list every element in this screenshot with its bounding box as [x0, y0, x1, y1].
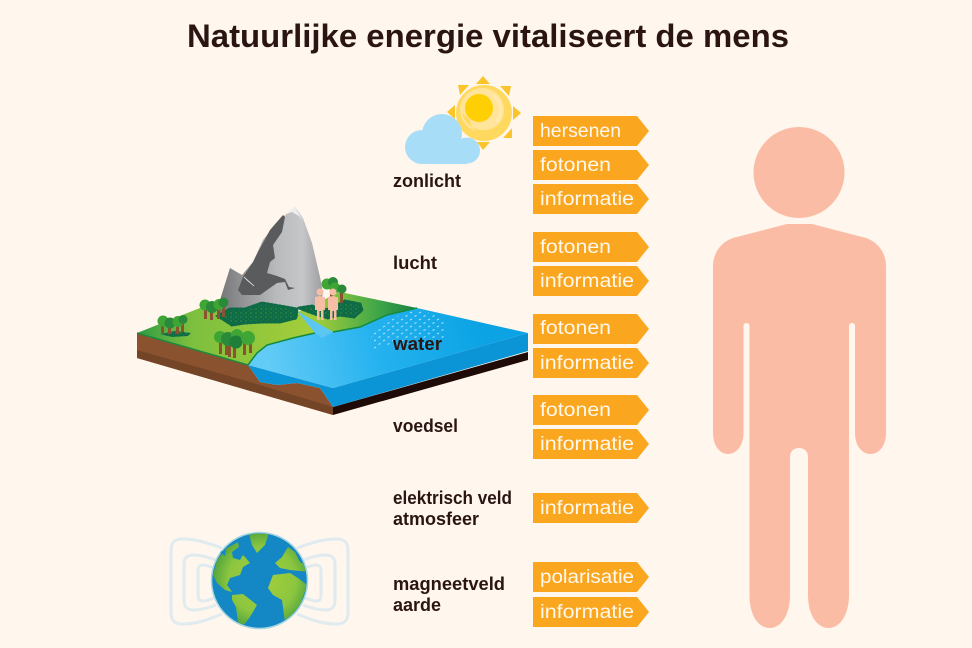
tag: fotonen: fotonen — [540, 400, 611, 421]
tag: fotonen: fotonen — [540, 237, 611, 258]
label: magneetveld aarde: aarde — [393, 595, 441, 615]
river — [297, 311, 333, 338]
europe — [275, 547, 306, 572]
greenland — [249, 534, 268, 553]
tag: informatie — [533, 493, 649, 523]
label: lucht: lucht — [393, 253, 437, 273]
icon: sun behind cloud — [405, 76, 521, 164]
tag: informatie: informatie — [540, 434, 634, 455]
north america — [213, 542, 250, 592]
icon: sun — [447, 76, 521, 150]
tag: informatie: informatie — [540, 271, 634, 292]
icon: earth with magnetic field — [171, 530, 348, 628]
bushes — [160, 301, 362, 337]
tag: hersenen — [533, 116, 649, 146]
snow cap — [284, 207, 303, 221]
africa — [268, 573, 307, 622]
head — [754, 127, 844, 218]
tag: informatie — [533, 429, 649, 459]
tag: informatie — [533, 184, 649, 214]
tag: fotonen — [533, 395, 649, 425]
tag: polarisatie — [533, 562, 649, 592]
magnetic field lines — [171, 539, 348, 624]
tag: fotonen — [533, 232, 649, 262]
tag: informatie: informatie — [540, 498, 634, 519]
tag: informatie: informatie — [540, 602, 634, 623]
person silhouette — [713, 127, 886, 628]
tag: informatie: informatie — [540, 353, 634, 374]
tag: polarisatie: polarisatie — [540, 567, 634, 588]
tag: informatie: informatie — [540, 189, 634, 210]
small people — [315, 288, 338, 320]
tag: informatie — [533, 266, 649, 296]
label: voedsel: voedsel — [393, 416, 458, 436]
tag: hersenen: hersenen — [540, 121, 621, 142]
label: zonlicht: zonlicht — [393, 171, 461, 191]
tag: informatie — [533, 597, 649, 627]
foam on water — [371, 309, 444, 348]
label: water: water — [392, 334, 442, 354]
trees — [158, 277, 346, 358]
globe — [212, 532, 308, 628]
south america — [232, 594, 257, 626]
water side — [248, 333, 528, 407]
label: magneetveld aarde: magneetveld — [393, 574, 505, 594]
icon: cloud — [405, 114, 480, 164]
body — [713, 224, 886, 628]
title: Natuurlijke energie vitaliseert de mens — [187, 18, 789, 54]
illustration: landscape block — [137, 207, 528, 415]
tag: fotonen: fotonen — [540, 155, 611, 176]
soil side — [137, 333, 333, 415]
label: elektrisch veld atmosfeer: atmosfeer — [393, 509, 479, 529]
grass left — [137, 300, 315, 365]
tag: fotonen — [533, 314, 649, 344]
tag: fotonen: fotonen — [540, 318, 611, 339]
label: elektrisch veld atmosfeer: elektrisch veld — [393, 488, 512, 508]
mountain streak — [244, 277, 254, 286]
tag: fotonen — [533, 150, 649, 180]
mountain — [220, 207, 323, 314]
hudson bay — [220, 546, 245, 560]
black base — [333, 352, 528, 415]
tag: informatie — [533, 348, 649, 378]
mountain shadow — [238, 215, 295, 295]
water top — [248, 308, 528, 388]
grass right — [298, 292, 417, 332]
